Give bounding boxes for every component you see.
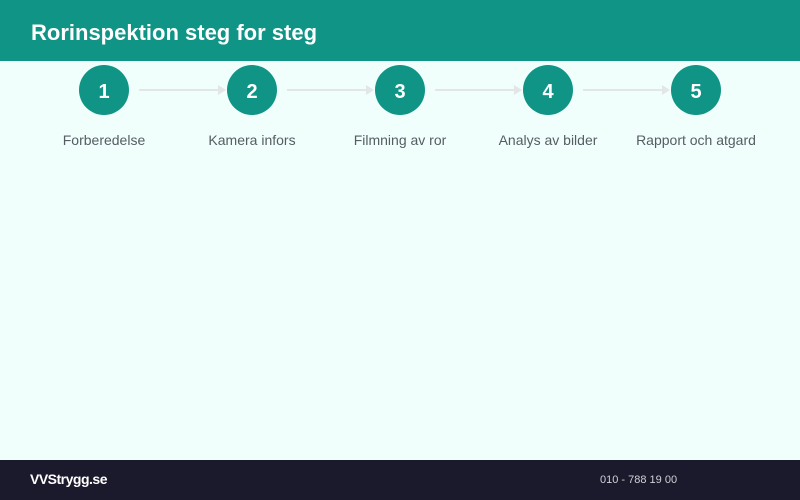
step 4: 4 [542, 81, 554, 103]
label 2: Kamera infors [208, 132, 296, 148]
label 5: Rapport och atgard [636, 132, 756, 148]
step 3 [375, 65, 425, 115]
label 1: Forberedelse [63, 132, 145, 148]
step 2: 2 [246, 81, 258, 103]
header [0, 0, 800, 61]
brand: VVStrygg.se [30, 471, 107, 487]
step 1 [79, 65, 129, 115]
step 4 [523, 65, 573, 115]
label 3: Filmning av ror [354, 132, 446, 148]
step 2 [227, 65, 277, 115]
footer [0, 460, 800, 500]
step 5 [671, 65, 721, 115]
phone: 010 - 788 19 00 [600, 474, 677, 486]
arrows [139, 85, 670, 95]
step 5: 5 [690, 81, 702, 103]
title: Rorinspektion steg for steg [31, 20, 317, 45]
step 3: 3 [394, 81, 406, 103]
label 4: Analys av bilder [499, 132, 597, 148]
step 1: 1 [98, 81, 110, 103]
